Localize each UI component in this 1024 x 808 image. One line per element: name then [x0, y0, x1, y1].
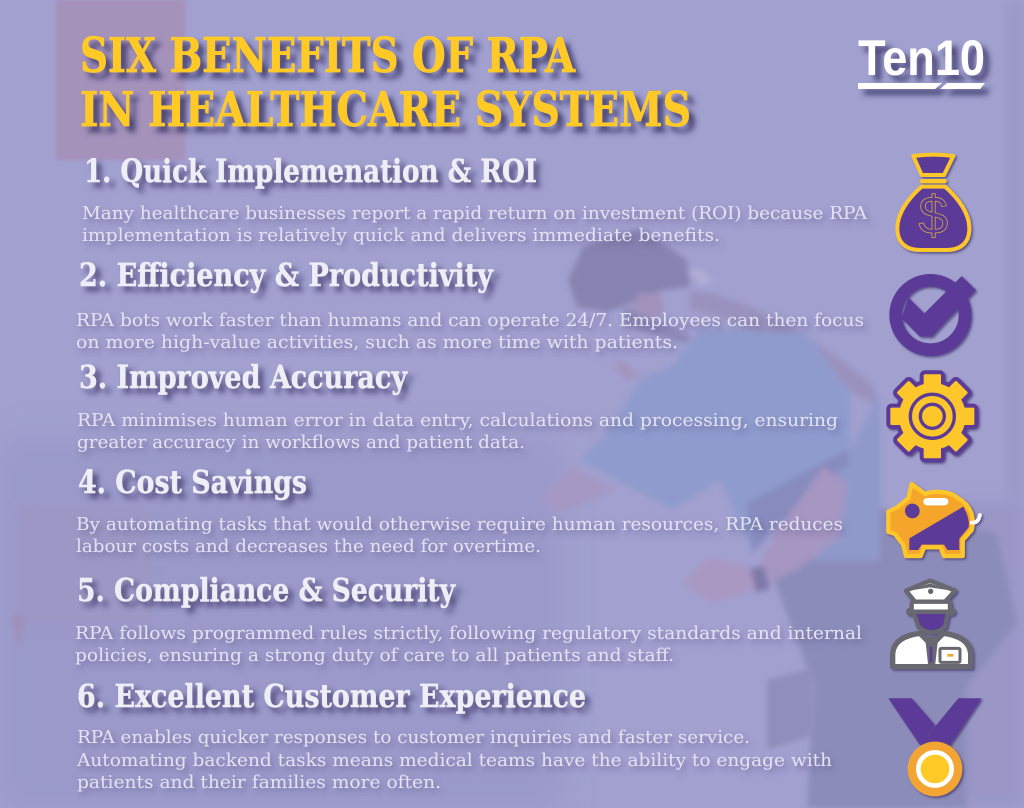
chair and folded clothes [767, 668, 813, 750]
icon: security officer [893, 581, 971, 667]
benefit 6 text: Automating backend tasks means medical teams have the ability to engage with [76, 750, 832, 771]
benefit 1 heading: 1. Quick Implemenation & ROI [84, 152, 537, 190]
title: IN HEALTHCARE SYSTEMS [80, 82, 691, 138]
icon: piggy bank [888, 484, 980, 556]
benefit 6 text: RPA enables quicker responses to customer inquiries and faster service. [77, 727, 750, 748]
nurse [540, 228, 880, 603]
benefit 2 heading: 2. Efficiency & Productivity [79, 256, 494, 294]
icon: gear [890, 374, 974, 458]
benefit 5 heading: 5. Compliance & Security [77, 571, 456, 609]
logo: Ten10: Ten10 [858, 30, 985, 86]
title: SIX BENEFITS OF RPA [80, 28, 576, 84]
benefit 5 text: RPA follows programmed rules strictly, following regulatory standards and internal [75, 623, 862, 644]
icon: medal [888, 698, 982, 796]
benefit 2 text: on more high-value activities, such as more time with patients. [76, 332, 678, 353]
benefit 3 text: RPA minimises human error in data entry, calculations and processing, ensuring [77, 410, 838, 431]
benefit 1 text [82, 203, 868, 246]
icon: money bag: $ [918, 187, 948, 246]
benefit 4 heading: 4. Cost Savings [78, 463, 307, 501]
icon: money bag [897, 155, 969, 250]
benefit 1 text: implementation is relatively quick and delivers immediate benefits. [82, 225, 720, 246]
benefit 5 text [75, 623, 862, 666]
icon: check mark in ring [896, 276, 976, 350]
benefit 5 text: policies, ensuring a strong duty of care to all patients and staff. [75, 645, 674, 666]
benefit 4 text [76, 514, 843, 557]
benefit 6 text: patients and their families more often. [77, 772, 441, 793]
benefit 3 text [77, 410, 838, 453]
benefit 6 heading: 6. Excellent Customer Experience [77, 677, 586, 715]
benefit 4 text: By automating tasks that would otherwise require human resources, RPA reduces [76, 514, 843, 535]
benefit 6 text [76, 727, 832, 793]
benefit 3 text: greater accuracy in workflows and patient data. [77, 432, 525, 453]
trousers [773, 500, 1017, 808]
title [80, 28, 691, 138]
benefit 1 text: Many healthcare businesses report a rapid return on investment (ROI) because RPA [82, 203, 868, 224]
benefit 2 text [76, 310, 864, 353]
benefit 2 text: RPA bots work faster than humans and can operate 24/7. Employees can then focus [76, 310, 864, 331]
benefit 3 heading: 3. Improved Accuracy [79, 358, 408, 396]
benefit 4 text: labour costs and decreases the need for overtime. [76, 536, 541, 557]
